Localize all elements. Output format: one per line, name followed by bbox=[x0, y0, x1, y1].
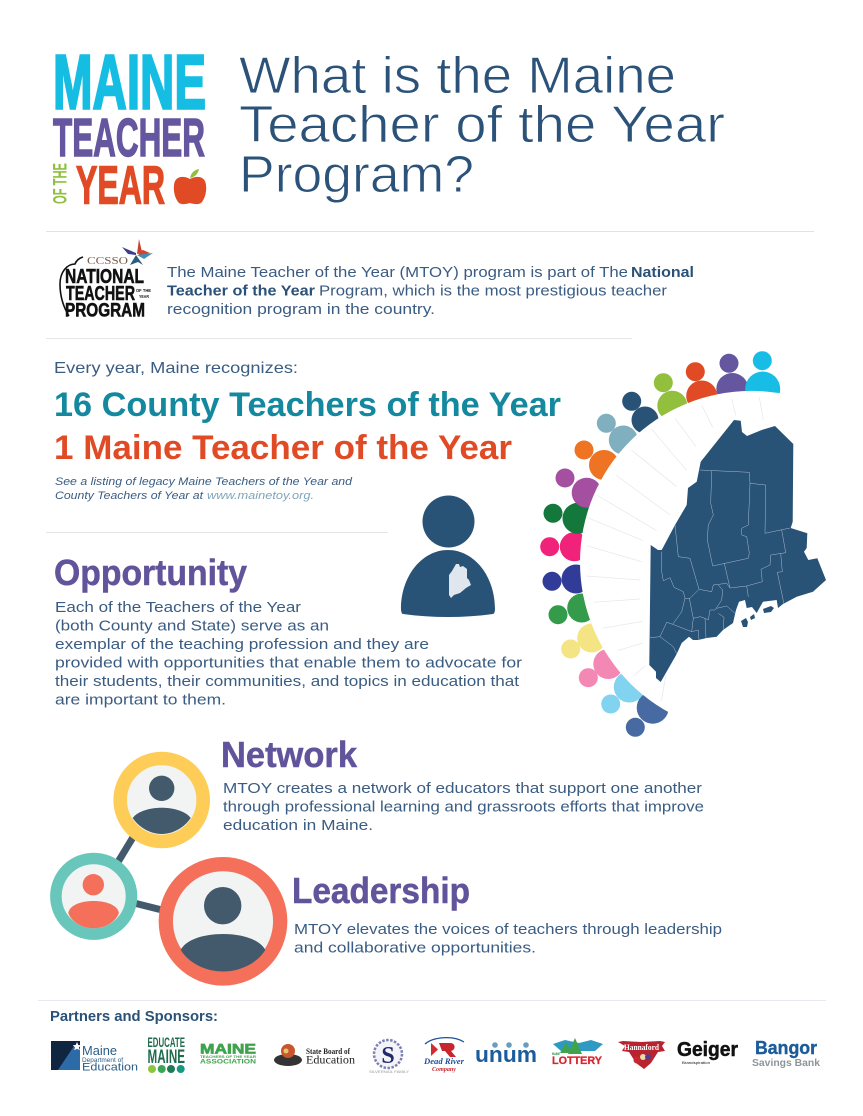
logo: Dead River Company: Company bbox=[432, 1067, 456, 1073]
recognition heading: 1 Maine Teacher of the Year bbox=[54, 429, 512, 467]
logo: Maine Department of Education: Maine bbox=[82, 1043, 117, 1058]
section: Opportunity bbox=[54, 552, 522, 708]
text: Network description: education in Maine. bbox=[223, 818, 373, 834]
logo: Dead River Company bbox=[423, 1038, 465, 1073]
logo: Educate Maine: MAINE bbox=[148, 1047, 185, 1068]
text: Opportunity description: are important to them. bbox=[55, 692, 226, 708]
recognition heading: 16 County Teachers of the Year bbox=[54, 386, 561, 424]
heading: Opportunity: Opportunity bbox=[54, 552, 247, 593]
intro text bbox=[167, 265, 694, 318]
teacher: magenta bbox=[540, 532, 589, 561]
icon: coral network person bbox=[166, 864, 280, 978]
teacher: cyan bbox=[745, 351, 780, 406]
teacher: gray-teal bbox=[597, 414, 638, 454]
logo: Maine Department of Education: Department of bbox=[82, 1058, 123, 1064]
logo: National Teacher of the Year Program: PROGRAM bbox=[65, 300, 145, 322]
map of Maine counties bbox=[649, 420, 826, 682]
logo: Maine Teachers of the Year Association: MAINE bbox=[200, 1040, 256, 1056]
teacher: pink bbox=[579, 649, 623, 687]
text: Opportunity description: provided with opportunities that enable them to advocate for bbox=[55, 656, 522, 672]
heading: partners and sponsors: Partners and Sponsors: bbox=[50, 1008, 218, 1025]
logo: State Board of Education: Education bbox=[306, 1052, 355, 1066]
title bbox=[239, 47, 725, 204]
intro text: National bbox=[631, 265, 694, 281]
icon: person with Maine bbox=[401, 496, 495, 617]
logo: Geiger: Geiger bbox=[677, 1039, 738, 1061]
logo: Hannaford bbox=[618, 1041, 665, 1069]
logo: Silvernail Family seal: S bbox=[381, 1043, 395, 1069]
teacher: red bbox=[686, 362, 717, 412]
logo: Maine Department of Education: Education bbox=[82, 1062, 138, 1074]
logo: Maine Teachers of the Year Association bbox=[200, 1040, 256, 1066]
heading: Leadership: Leadership bbox=[292, 870, 470, 911]
text: Opportunity description: (both County and State) serve as an bbox=[55, 618, 329, 634]
logo: Maine Teachers of the Year Association: ASSOCIATION bbox=[200, 1060, 256, 1066]
section: Leadership bbox=[292, 870, 722, 956]
teacher: violet bbox=[556, 468, 602, 508]
title: Program? bbox=[239, 146, 474, 204]
teacher: navy blue bbox=[626, 692, 669, 737]
recognition heading bbox=[54, 360, 561, 467]
logo: Maine Lottery bbox=[552, 1038, 603, 1067]
legacy listing note bbox=[55, 476, 353, 502]
logo: Maine Teacher of the Year: YEAR bbox=[76, 156, 165, 216]
section: Network bbox=[221, 734, 704, 834]
logo: Maine Lottery: LOTTERY bbox=[552, 1055, 603, 1067]
logo: Maine Lottery: MAINE bbox=[552, 1051, 560, 1056]
logo: National Teacher of the Year Program: OF THE bbox=[136, 288, 151, 293]
text: Leadership description: MTOY elevates the voices of teachers through leadership bbox=[294, 922, 722, 938]
logo: State Board of Education bbox=[274, 1044, 355, 1066]
logo: Maine Teachers of the Year Association: TEACHERS OF THE YEAR bbox=[200, 1054, 256, 1059]
logo: National Teacher of the Year Program: YEAR bbox=[139, 294, 150, 299]
teacher: purple bbox=[716, 354, 748, 405]
text: Leadership description: and collaborative opportunities. bbox=[294, 940, 536, 956]
teacher: light green bbox=[548, 594, 596, 624]
logo: Maine Teacher of the Year: TEACHER bbox=[53, 108, 205, 168]
teacher: indigo bbox=[542, 564, 590, 594]
teacher: sky blue bbox=[601, 672, 645, 714]
icon: yellow network person bbox=[120, 758, 203, 842]
teacher: dark blue bbox=[622, 392, 658, 434]
text: Opportunity description: Each of the Teachers of the Year bbox=[55, 600, 301, 616]
teacher: dark green bbox=[544, 503, 594, 534]
logo: Educate Maine: EDUCATE bbox=[148, 1035, 185, 1050]
logo: Maine Teacher of the Year: OF THE bbox=[50, 163, 72, 204]
logo: Silvernail Family seal: SILVERNAIL FAMILY bbox=[369, 1069, 409, 1074]
logo: Maine Teacher of the Year: MAINE bbox=[53, 40, 206, 126]
text: Opportunity description bbox=[55, 600, 522, 708]
logo: National Teacher of the Year Program: CCSSO bbox=[87, 255, 128, 267]
text: Opportunity description: their students, their communities, and topics in education that bbox=[55, 674, 519, 690]
title: Teacher of the Year bbox=[239, 96, 725, 154]
recognition heading: Every year, Maine recognizes: bbox=[54, 360, 298, 377]
text: Network description bbox=[223, 781, 704, 834]
logo: Educate Maine bbox=[148, 1035, 185, 1073]
intro text: The Maine Teacher of the Year (MTOY) program is part of The bbox=[167, 265, 628, 281]
logo: Silvernail Family seal bbox=[369, 1040, 409, 1074]
teacher: yellow bbox=[561, 624, 606, 658]
legacy listing note: See a listing of legacy Maine Teachers of the Year and bbox=[55, 476, 353, 488]
heading: Network: Network bbox=[221, 734, 358, 775]
logo: National Teacher of the Year Program: NATIONAL bbox=[65, 266, 144, 288]
logo: Geiger: Brandspiration bbox=[682, 1061, 710, 1065]
legacy listing note: www.mainetoy.org. bbox=[207, 490, 314, 502]
teacher: orange bbox=[574, 440, 619, 480]
logo: Dead River Company: Dead River bbox=[423, 1057, 465, 1066]
logo: Maine Department of Education bbox=[51, 1041, 138, 1074]
logo: National Teacher of the Year Program: TEACHER bbox=[66, 283, 135, 305]
logo: Hannaford: Hannaford bbox=[624, 1043, 659, 1052]
text: Network description: through professional learning and grassroots efforts that improve bbox=[223, 800, 704, 816]
text: Opportunity description: exemplar of the teaching profession and they are bbox=[55, 637, 429, 653]
logo: Maine Teacher of the Year bbox=[50, 40, 206, 216]
logo: Bangor Savings Bank: Savings Bank bbox=[752, 1057, 820, 1069]
logo: Unum: unum bbox=[475, 1042, 537, 1067]
fan of 16 county teachers bbox=[540, 351, 863, 737]
logo: Bangor Savings Bank: Bangor bbox=[755, 1038, 817, 1058]
text: Leadership description bbox=[294, 922, 722, 956]
title: What is the Maine bbox=[239, 47, 676, 105]
logo: Bangor Savings Bank bbox=[752, 1038, 820, 1069]
intro text: Program, which is the most prestigious teacher bbox=[319, 284, 667, 300]
connector lines bbox=[118, 834, 162, 910]
intro text: recognition program in the country. bbox=[167, 302, 435, 318]
teacher: lime bbox=[654, 373, 687, 421]
text: Network description: MTOY creates a network of educators that support one another bbox=[223, 781, 702, 797]
sponsor logos bbox=[51, 1035, 820, 1074]
icon: teal network person bbox=[56, 858, 132, 934]
legacy listing note: County Teachers of Year at bbox=[55, 490, 204, 502]
logo: National Teacher of the Year Program bbox=[60, 239, 153, 322]
intro text: Teacher of the Year bbox=[167, 284, 315, 300]
logo: State Board of Education: State Board of bbox=[306, 1047, 350, 1056]
